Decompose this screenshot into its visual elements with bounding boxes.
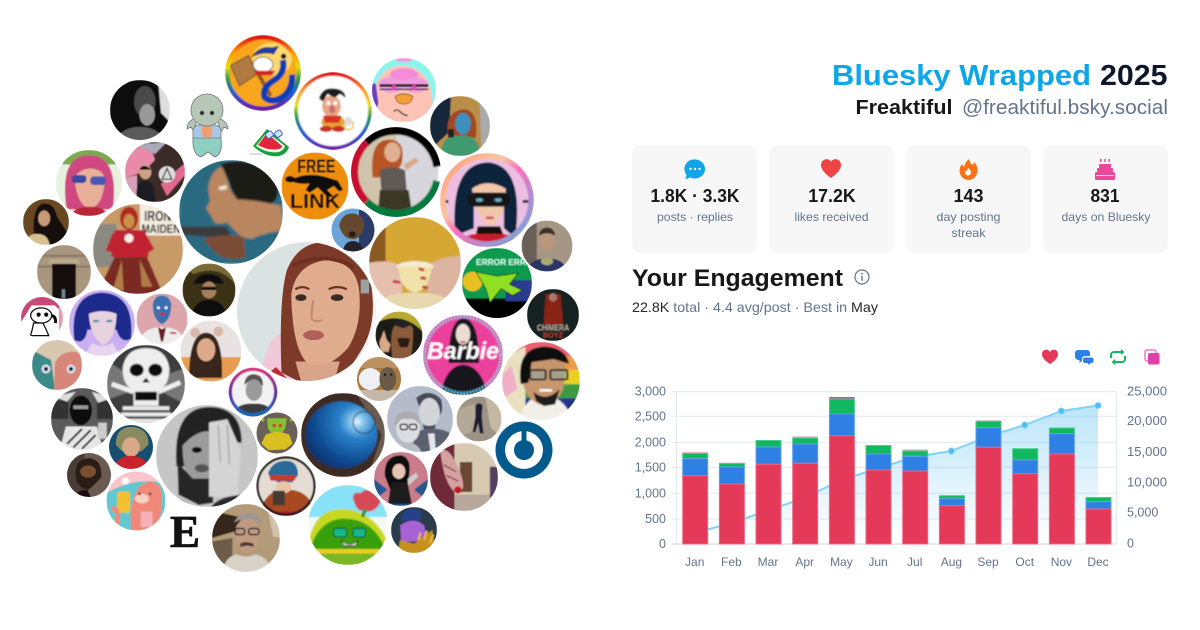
avatar: figure among rocks <box>456 396 502 442</box>
stat card: posts and replies <box>632 145 757 253</box>
left axis labels: 1,500 <box>635 460 666 474</box>
avatar: hand with red ring <box>430 443 498 511</box>
left axis labels: 3,000 <box>635 385 666 399</box>
avatar: blue face painting <box>430 96 490 156</box>
left axis labels: 0 <box>659 537 666 551</box>
avatar: man holding baby yoda <box>522 220 572 272</box>
month labels: Nov <box>1051 555 1072 569</box>
month labels: Oct <box>1015 555 1035 569</box>
icon: birthday cake <box>1095 159 1115 180</box>
stat card: posts and replies: 1.8K · 3.3K <box>650 186 740 206</box>
icon: heart <box>821 159 841 178</box>
stat card: streak: streak <box>952 226 987 240</box>
avatar: skull skeleton <box>107 345 185 423</box>
engagement summary: 22.8K total · 4.4 avg/post · Best in May <box>632 299 878 315</box>
avatar: furby <box>369 58 436 122</box>
avatar: mr potato with rainbow ring <box>294 72 372 150</box>
stat card: days on Bluesky: 831 <box>1090 186 1120 206</box>
month labels: Jan <box>685 555 704 569</box>
avatar: blue ring logo <box>496 422 552 478</box>
avatar: man with glasses and moustache <box>212 504 280 572</box>
right axis labels: 15,000 <box>1127 445 1167 459</box>
bar: Feb <box>719 462 744 544</box>
avatar: caricature man on pride flag <box>502 342 580 420</box>
month labels: Dec <box>1087 555 1109 569</box>
bar: Mar <box>756 440 781 544</box>
left axis labels <box>635 385 666 551</box>
bar: Jun <box>866 446 891 544</box>
avatar: masked hero with gradient ring <box>440 153 534 247</box>
right axis labels <box>1127 384 1167 550</box>
stat card: days on Bluesky <box>1043 145 1168 253</box>
legend: quotes <box>1145 350 1160 364</box>
avatar: iron man doll with iron maiden text: MAIDEN <box>142 223 180 236</box>
avatar: green hands comic <box>462 248 532 319</box>
avatar: boy with gradient ring <box>228 368 278 417</box>
avatar: white and tabby cats <box>357 357 401 401</box>
bar: Jan <box>683 452 708 544</box>
legend: reposts <box>1111 349 1125 365</box>
legend: replies <box>1075 350 1094 365</box>
bar: Nov <box>1049 428 1074 544</box>
avatar: woman with pink hair <box>56 150 122 216</box>
bar: Jul <box>903 449 928 544</box>
month labels: Jul <box>907 555 922 569</box>
chart gridlines <box>672 392 1116 544</box>
heading: your engagement: Your Engagement <box>632 265 843 292</box>
icon: info <box>855 270 869 284</box>
avatar: pilot figure on plate <box>256 456 316 516</box>
avatar: pencil sketch couple <box>387 386 453 452</box>
month labels: Jun <box>868 555 888 569</box>
avatar: person by pink mural <box>125 142 185 202</box>
avatar: chimera boyz <box>527 289 579 341</box>
right axis labels: 0 <box>1127 536 1134 550</box>
left axis labels: 1,000 <box>635 486 666 500</box>
stat card: likes: 17.2K <box>808 186 856 206</box>
stat card: likes: likes received <box>794 210 868 224</box>
avatar: free link panther: LINK <box>290 190 340 213</box>
avatar: free link panther <box>282 152 348 220</box>
stat card: streak <box>906 145 1031 253</box>
avatar: green goblin figure <box>256 412 298 454</box>
icon: speech bubble <box>684 159 705 179</box>
stacked bar and line chart: engagement by month <box>635 384 1167 569</box>
avatar: green hands comic: ERROR <box>476 257 506 267</box>
avatar: chimera boyz: BOYZ <box>543 330 564 339</box>
avatar: E logo: E <box>170 507 200 557</box>
avatar: black and white engraving <box>51 388 113 450</box>
left axis labels: 500 <box>645 512 666 526</box>
title: Bluesky Wrapped <box>832 60 1091 92</box>
right axis labels: 25,000 <box>1127 384 1167 398</box>
avatar: teacup in hands <box>369 217 461 311</box>
avatar: man with moustache pointing <box>376 312 422 358</box>
avatar: addams barbie poster: Barbie <box>427 338 499 365</box>
avatar: sor juana painting <box>23 199 69 245</box>
month labels <box>685 555 1109 569</box>
avatar: otter taking selfie <box>106 472 166 530</box>
bar: Oct <box>1013 449 1038 544</box>
right axis labels: 20,000 <box>1127 414 1167 428</box>
right axis labels: 10,000 <box>1127 476 1167 490</box>
bar: May <box>829 397 854 544</box>
avatar: selfie with flag-coloured ring <box>351 127 441 217</box>
avatar: man in black hat <box>182 264 236 316</box>
stat card: likes <box>769 145 894 253</box>
avatar: painted woman with gun <box>179 160 283 264</box>
avatar: chimera boyz: CHIMERA <box>537 324 569 333</box>
header <box>832 60 1168 119</box>
left axis labels: 2,000 <box>635 435 666 449</box>
legend: likes <box>1042 350 1058 364</box>
avatar: bw bearded man <box>110 80 170 140</box>
avatar: addams barbie poster <box>423 315 503 395</box>
avatar: thanos gauntlet <box>391 507 437 553</box>
month labels: Apr <box>795 555 814 569</box>
avatar: green hands comic: ERR <box>508 257 526 267</box>
avatar: teal and salmon puppet <box>32 340 82 390</box>
right axis labels: 5,000 <box>1127 506 1158 520</box>
account handle: @freaktiful.bsky.social <box>962 97 1168 119</box>
avatar: cartoon cat on phone <box>21 297 63 339</box>
icon: flame <box>960 159 978 180</box>
avatar: main selfie red-haired woman <box>237 242 376 381</box>
account name: Freaktiful <box>856 97 952 119</box>
avatar: E logo <box>160 507 210 557</box>
avatar: anime blue hair <box>69 290 135 356</box>
month labels: Mar <box>758 555 778 569</box>
avatar: green hill with sunglasses <box>308 485 388 565</box>
avatar: curly-haired pixel girl <box>374 452 428 506</box>
avatar bubble cluster <box>21 35 580 572</box>
avatar: smiling woman on orange <box>180 320 242 382</box>
legend icons <box>1042 349 1160 365</box>
left axis labels: 2,500 <box>635 409 666 423</box>
stat card: days on Bluesky: days on Bluesky <box>1062 210 1150 224</box>
stat card: streak: 143 <box>954 186 984 206</box>
bar: Apr <box>793 436 818 544</box>
avatar: stone doorway <box>37 245 91 299</box>
bar: Sep <box>976 420 1001 544</box>
avatar: luchador in white suit <box>136 294 188 344</box>
month labels: Sep <box>977 555 999 569</box>
month labels: Feb <box>721 555 742 569</box>
cumulative line <box>695 402 1101 533</box>
bar: Dec <box>1086 498 1111 544</box>
title: 2025 <box>1100 60 1168 92</box>
avatar: free link panther: FREE <box>297 157 335 177</box>
avatar: blue sphere <box>301 393 385 477</box>
avatar: dog-faced person <box>332 208 374 252</box>
month labels: Aug <box>941 555 962 569</box>
avatar: painted child in red <box>109 425 153 469</box>
stacked bars <box>683 397 1111 544</box>
bar: Aug <box>939 496 964 544</box>
avatar: man covering eye with hand <box>156 405 258 507</box>
month labels: May <box>830 555 853 569</box>
cumulative area <box>695 406 1098 544</box>
avatar: iron man doll with iron maiden text: IRON <box>144 209 171 225</box>
avatar: watermelon sticker <box>250 129 289 156</box>
avatar: iron man doll with iron maiden text <box>93 204 183 294</box>
stat card: posts and replies: posts · replies <box>657 210 733 224</box>
stat card: streak: day posting <box>936 210 1000 224</box>
avatar: dark portrait painting <box>67 453 111 497</box>
avatar: cthulhu sticker <box>187 94 228 157</box>
avatar: hammer cartoon with rainbow ring <box>225 35 301 111</box>
